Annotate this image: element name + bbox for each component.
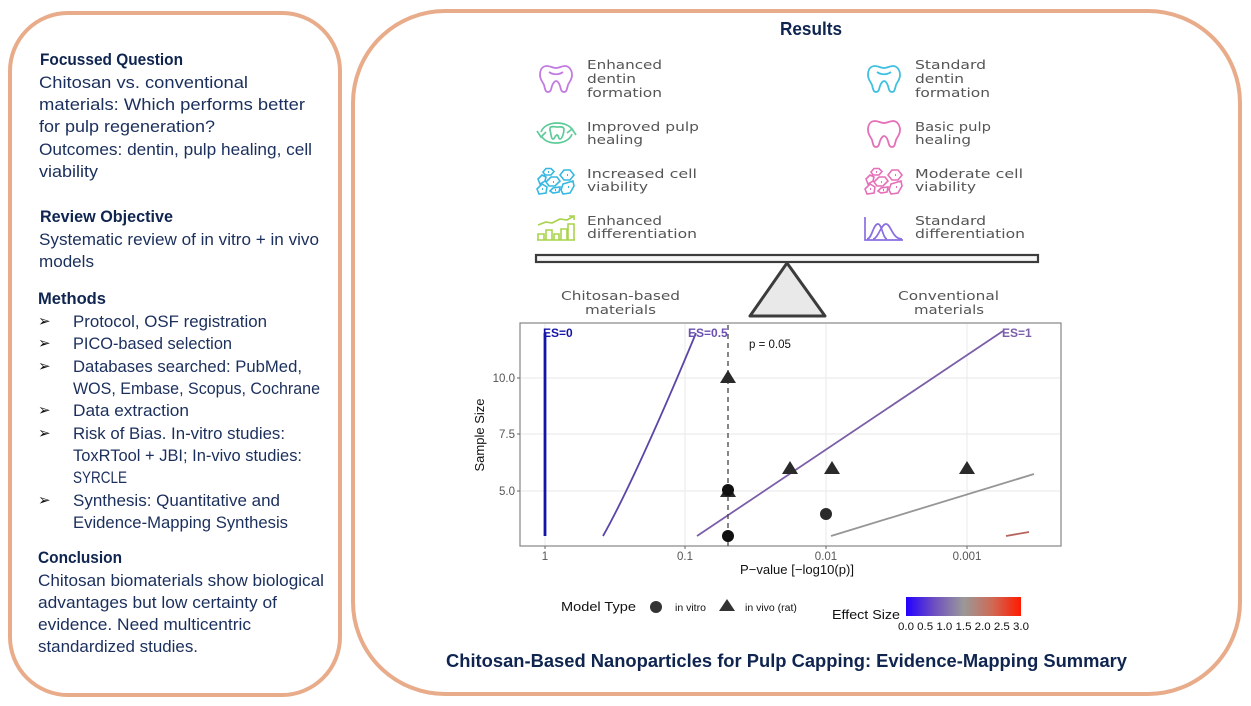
- panel: summary: [10, 13, 340, 695]
- icon: blue tooth: [868, 66, 900, 92]
- curve: grey: [831, 474, 1034, 536]
- list: methods: ➢: [38, 357, 51, 375]
- curve: ES=0.5: [603, 333, 696, 536]
- curve labels: ES=1: [1002, 326, 1032, 340]
- list: methods: Evidence-Mapping Synthesis: [73, 514, 288, 532]
- heading: methods: Methods: [38, 290, 106, 308]
- label: increased cell: Increased cell: [587, 166, 697, 181]
- text: conclusion: advantages but low certainty of: [38, 594, 277, 612]
- icon: pink cells: [865, 168, 902, 194]
- list: methods: WOS, Embase, Scopus, Cochrane: [73, 380, 320, 398]
- text: review objective: [39, 231, 319, 271]
- text: focussed question: for pulp regeneration?: [39, 118, 215, 136]
- legend: effect size: Effect Size: [832, 607, 900, 622]
- y axis: Sample Size: [472, 399, 487, 471]
- text: focussed question: viability: [39, 163, 99, 181]
- label: standard dentin: [915, 57, 990, 100]
- text: conclusion: [38, 572, 324, 656]
- y axis: [472, 373, 515, 498]
- x axis: 1: [542, 551, 548, 563]
- label: chitosan-based materials: Chitosan-based: [561, 288, 680, 303]
- heading: results: Results: [780, 19, 842, 39]
- legend: model type: in vitro: [675, 602, 706, 614]
- label: basic pulp: Basic pulp: [915, 119, 991, 134]
- x axis: 0.1: [677, 551, 693, 563]
- label: moderate cell: Moderate cell: [915, 166, 1023, 181]
- label: conventional materials: materials: [914, 302, 984, 317]
- label: enhanced differentiation: [587, 213, 697, 241]
- text: conclusion: evidence. Need multicentric: [38, 616, 251, 634]
- label: increased cell: [587, 166, 697, 194]
- legend: effect size: [832, 597, 1029, 633]
- label: standard dentin: formation: [915, 85, 990, 100]
- label: enhanced dentin: formation: [587, 85, 662, 100]
- heading: conclusion: Conclusion: [38, 549, 122, 567]
- list: methods: Databases searched: PubMed,: [73, 358, 302, 376]
- list: methods: ➢: [38, 491, 51, 509]
- x axis: 0.01: [815, 551, 837, 563]
- label: enhanced dentin: Enhanced: [587, 57, 662, 72]
- x axis: P−value [−log10(p)]: [740, 562, 854, 577]
- label: standard dentin: dentin: [915, 71, 964, 86]
- list: methods: ToxRTool + JBI; In-vivo studies:: [73, 447, 302, 465]
- label: improved pulp: Improved pulp: [587, 119, 699, 134]
- list: methods: ➢: [38, 401, 51, 419]
- icon: purple distribution curves: [865, 217, 903, 240]
- list: methods: [38, 312, 320, 532]
- icon: blue cells: [537, 168, 574, 194]
- y axis: 5.0: [499, 486, 515, 498]
- x axis: [542, 551, 981, 577]
- text: review objective: models: [39, 253, 94, 271]
- label: basic pulp: [915, 119, 991, 147]
- label: enhanced differentiation: differentiation: [587, 226, 697, 241]
- annotation: p = 0.05: p = 0.05: [749, 339, 791, 351]
- y axis: 10.0: [493, 373, 515, 385]
- icon: pink tooth: [868, 121, 900, 147]
- curve labels: ES=0: [543, 326, 573, 340]
- list: methods: Data extraction: [73, 402, 189, 420]
- curve: red: [1006, 532, 1029, 536]
- title: Chitosan-Based Nanoparticles for Pulp Capping: Evidence-Mapping Summary: [446, 650, 1128, 671]
- markers: in vitro: [722, 484, 832, 542]
- list: methods: Protocol, OSF registration: [73, 313, 267, 331]
- text: focussed question: [39, 74, 312, 181]
- markers: in vivo: [720, 370, 975, 497]
- list: methods: ➢: [38, 312, 51, 330]
- text: conclusion: Chitosan biomaterials show biological: [38, 572, 324, 590]
- y axis: 7.5: [499, 429, 515, 441]
- x axis: 0.001: [953, 551, 981, 563]
- curve labels: [543, 326, 1032, 340]
- text: focussed question: Chitosan vs. conventional: [39, 74, 248, 92]
- text: focussed question: Outcomes: dentin, pulp healing, cell: [39, 141, 312, 159]
- icon: purple tooth: [540, 66, 572, 92]
- label: improved pulp: healing: [587, 132, 643, 147]
- label: moderate cell: viability: [915, 179, 977, 194]
- heading: review objective: Review Objective: [40, 208, 173, 226]
- legend: model type: Model Type: [561, 599, 636, 614]
- list: methods: ➢: [38, 424, 51, 442]
- heading: focussed question: Focussed Question: [40, 51, 183, 69]
- legend: model type: [561, 599, 797, 614]
- label: standard dentin: Standard: [915, 57, 986, 72]
- curve: ES=1: [697, 331, 1003, 536]
- legend: model type: in vivo (rat): [745, 602, 797, 614]
- icon: green growth chart: [537, 216, 575, 240]
- curve: ES=0: [544, 333, 546, 536]
- chart: evidence map: [472, 323, 1061, 577]
- list: methods: ➢: [38, 334, 51, 352]
- list: methods: Synthesis: Quantitative and: [73, 492, 280, 510]
- list: methods: PICO-based selection: [73, 335, 232, 353]
- label: enhanced dentin: [587, 57, 662, 100]
- legend: effect size: 0.0 0.5 1.0 1.5 2.0 2.5 3.0: [898, 621, 1029, 633]
- balance scale: [536, 255, 1038, 316]
- reference line: p = 0.05: [727, 325, 729, 546]
- text: focussed question: materials: Which performs better: [39, 96, 306, 114]
- label: standard differentiation: [915, 213, 1025, 241]
- label: standard differentiation: differentiation: [915, 226, 1025, 241]
- label: standard differentiation: Standard: [915, 213, 986, 228]
- panel: results: [353, 11, 1240, 694]
- label: conventional materials: Conventional: [898, 288, 999, 303]
- icon: green healing tooth: [537, 123, 576, 143]
- label: chitosan-based materials: [561, 288, 680, 317]
- list: methods: SYRCLE: [73, 469, 127, 487]
- label: chitosan-based materials: materials: [585, 302, 656, 317]
- text: conclusion: standardized studies.: [38, 638, 198, 656]
- label: enhanced dentin: dentin: [587, 71, 636, 86]
- label: moderate cell: [915, 166, 1023, 194]
- label: conventional materials: [898, 288, 999, 317]
- label: enhanced differentiation: Enhanced: [587, 213, 662, 228]
- list: methods: Risk of Bias. In-vitro studies:: [73, 425, 285, 443]
- label: improved pulp: [587, 119, 699, 147]
- label: increased cell: viability: [587, 179, 649, 194]
- curve labels: ES=0.5: [688, 326, 728, 340]
- label: basic pulp: healing: [915, 132, 971, 147]
- text: review objective: Systematic review of in vitro + in vivo: [39, 231, 319, 249]
